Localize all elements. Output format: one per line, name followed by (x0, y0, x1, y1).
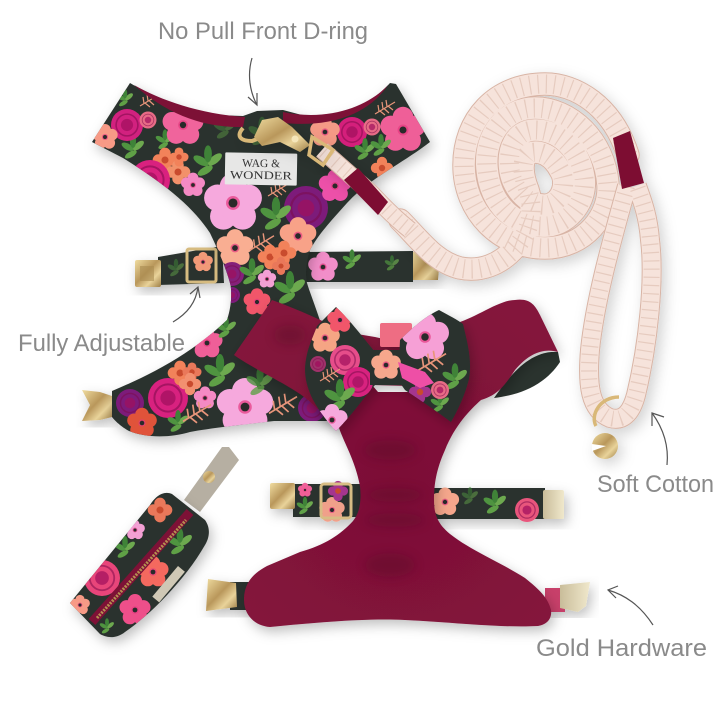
leash coil (400, 84, 628, 269)
floral harness (82, 83, 439, 437)
left strap with buckles (135, 246, 224, 287)
tag: Wag and Wonder (225, 152, 297, 186)
bow right wing (398, 310, 470, 422)
bow left wing (305, 307, 375, 431)
pouch body (70, 493, 209, 637)
rope end to clasp (322, 150, 410, 230)
bow left print (310, 307, 373, 434)
velvet lining crescents (134, 85, 388, 127)
heading: Soft Cotton: Soft Cotton (597, 471, 714, 498)
heading: No Pull Front D-ring: No Pull Front D-ring (158, 18, 368, 45)
tag: Wag and Wonder: WONDER (230, 169, 292, 183)
arrow: to front D-ring (248, 58, 257, 105)
handle loop (589, 186, 652, 419)
white gap below bow (372, 385, 412, 392)
burgundy velvet harness (206, 300, 590, 627)
velvet body (234, 300, 558, 627)
middle strap right with clip (425, 487, 564, 522)
brass clasp and D-ring (240, 117, 333, 165)
harness body with floral print (92, 83, 430, 436)
bow right print (401, 312, 469, 413)
lower left clip (82, 390, 112, 421)
right flap floral lining (494, 352, 560, 398)
bow knot (370, 350, 434, 388)
arrow: to rope (652, 413, 667, 465)
middle strap left with buckles (270, 481, 363, 522)
snap button (203, 471, 215, 483)
arrow: to gold hardware (608, 586, 653, 625)
zipper (92, 512, 190, 622)
floral print (92, 89, 426, 437)
leather tab (184, 447, 239, 512)
pouch print (70, 498, 194, 634)
heading: Gold Hardware: Gold Hardware (536, 635, 707, 662)
bow tie (305, 307, 470, 434)
velvet shading (274, 325, 425, 577)
bow top strap (380, 323, 412, 347)
heading: Fully Adjustable: Fully Adjustable (18, 330, 185, 357)
right strap with clip (305, 249, 439, 282)
arrow: to adjustable buckle (173, 287, 200, 322)
rope leash (322, 84, 652, 459)
burgundy whipping on clasp end (344, 168, 388, 215)
pouch (70, 447, 239, 637)
burgundy whipping on handle (613, 131, 644, 189)
lower clip left (206, 579, 252, 611)
tag: Wag and Wonder: WAG & (242, 158, 280, 170)
gold ring and charm (592, 397, 619, 459)
lower clip right (545, 582, 590, 612)
